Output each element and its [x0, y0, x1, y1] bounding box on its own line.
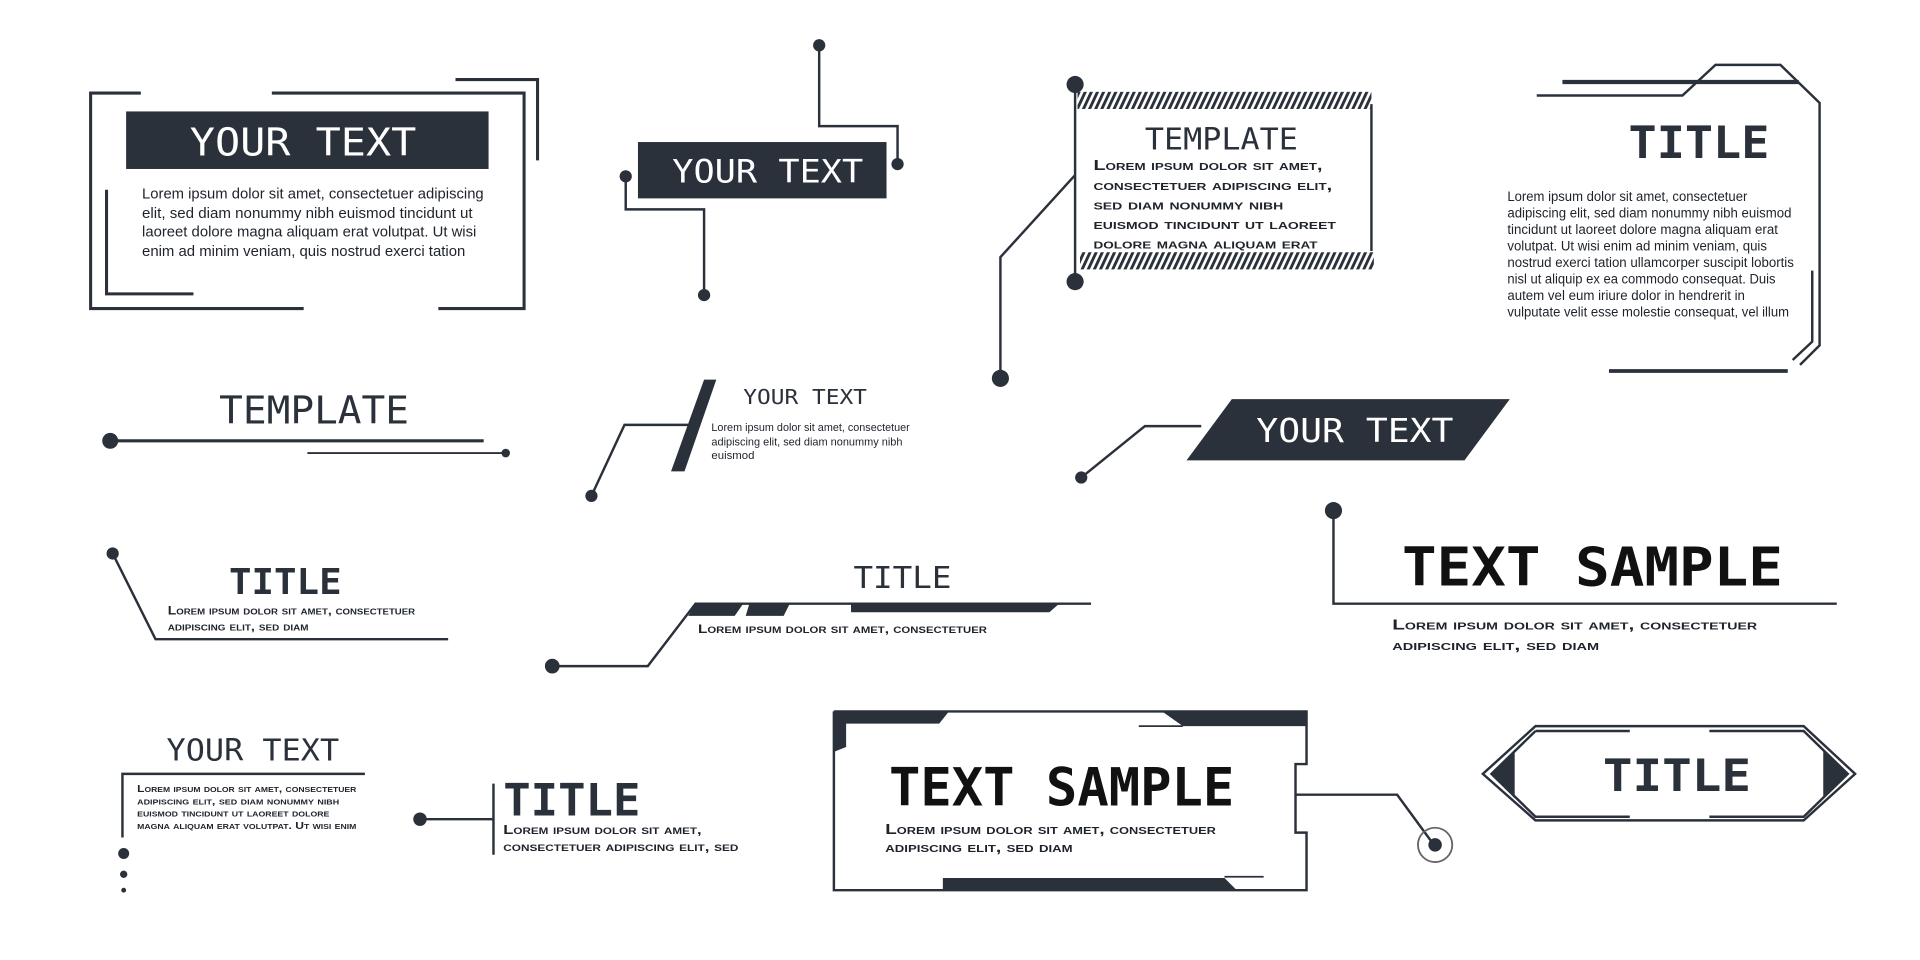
panel: hatched template box: TEMPLATE: [1145, 122, 1298, 157]
panel: title angled frame: volutpat. Ut wisi enim ad minim veniam, quis: [1507, 238, 1767, 254]
panel: title angled frame: autem vel eum iriure dolor in hendrerit in: [1507, 288, 1745, 304]
panel: your text with dots: magna aliquam erat volutpat. Ut wisi enim: [137, 821, 357, 832]
panel: title with angled line: [107, 547, 448, 639]
panel: your text with dots: Lorem ipsum dolor sit amet, consectetuer: [137, 784, 356, 795]
panel: hatched template box: sed diam nonummy nibh: [1093, 197, 1283, 213]
panel: title angled frame: [1507, 65, 1820, 371]
panel: circuit banner your text: YOUR TEXT: [672, 152, 863, 190]
panel: parallelogram your text: [1075, 399, 1510, 484]
panel: hatched template box: consectetuer adipiscing elit,: [1093, 178, 1332, 194]
panel: your text with dots: [118, 733, 365, 893]
panel: slanted bar your text: Lorem ipsum dolor sit amet, consectetuer: [711, 422, 910, 434]
body text 1: enim ad minim veniam, quis nostrud exerci tation: [142, 243, 465, 260]
panel: title with angled line: TITLE: [229, 562, 342, 603]
panel: parallelogram your text: YOUR TEXT: [1256, 411, 1454, 450]
panel: text sample underline: [1325, 502, 1837, 654]
panel: hexagon title: TITLE: [1603, 751, 1751, 802]
panel: bracket box your text: [91, 80, 538, 309]
panel: your text with dots: YOUR TEXT: [167, 733, 339, 768]
panel: your text with dots: adipiscing elit, sed diam nonummy nibh: [137, 796, 339, 807]
panel: text sample tech frame: adipiscing elit, sed diam: [885, 840, 1073, 856]
body text 1: elit, sed diam nonummy nibh euismod tincidunt ut: [142, 205, 473, 222]
panel: title with vertical line: consectetuer adipiscing elit, sed: [503, 839, 739, 854]
panel: title angled frame: nisl ut aliquip ex ea commodo consequat. Duis: [1507, 271, 1776, 287]
panel: text sample tech frame: Lorem ipsum dolor sit amet, consectetuer: [885, 822, 1217, 838]
panel: text sample underline: TEXT SAMPLE: [1402, 535, 1783, 598]
panel: hatched template box: [992, 76, 1374, 387]
body text 1: Lorem ipsum dolor sit amet, consectetuer adipiscing: [142, 185, 484, 202]
panel: title angled frame: nostrud exerci tation ullamcorper suscipit lobortis: [1507, 255, 1794, 271]
panel: template underline: TEMPLATE: [219, 389, 409, 433]
banner: your text: YOUR TEXT: [190, 121, 416, 165]
panel: title with segmented bar: TITLE: [853, 561, 951, 596]
panel: slanted bar your text: [585, 380, 910, 502]
panel: title angled frame: adipiscing elit, sed diam nonummy nibh euismod: [1507, 205, 1791, 221]
panel: title with segmented bar: Lorem ipsum dolor sit amet, consectetuer: [698, 622, 988, 636]
panel: template underline: [102, 389, 510, 457]
panel: text sample underline: adipiscing elit, sed diam: [1392, 638, 1599, 654]
panel: hatched template box: Lorem ipsum dolor sit amet,: [1093, 158, 1322, 174]
panel: text sample tech frame: [834, 711, 1452, 890]
body text 1: laoreet dolore magna aliquam erat volutpat. Ut wisi: [142, 223, 476, 240]
panel: hatched template box: euismod tincidunt ut laoreet: [1093, 217, 1336, 233]
panel: slanted bar your text: YOUR TEXT: [743, 385, 867, 409]
panel: title with segmented bar: [545, 561, 1091, 673]
panel: title angled frame: tincidunt ut laoreet dolore magna aliquam erat: [1507, 222, 1778, 238]
panel: text sample tech frame: TEXT SAMPLE: [889, 758, 1234, 819]
panel: title with angled line: adipiscing elit, sed diam: [168, 621, 309, 634]
body text 1: [142, 185, 484, 260]
panel: slanted bar your text: adipiscing elit, sed diam nonummy nibh: [711, 437, 902, 449]
panel: title angled frame: vulputate velit esse molestie consequat, vel illum: [1507, 305, 1789, 321]
panel: slanted bar your text: euismod: [711, 450, 754, 462]
panel: title with angled line: Lorem ipsum dolor sit amet, consectetuer: [168, 605, 415, 618]
panel: title angled frame: TITLE: [1629, 118, 1769, 169]
panel: title with vertical line: Lorem ipsum dolor sit amet,: [503, 822, 702, 837]
panel: title with vertical line: [413, 776, 739, 855]
panel: hexagon title: [1483, 726, 1855, 820]
panel: hatched template box: dolore magna aliquam erat: [1093, 237, 1318, 253]
banner: your text: [126, 111, 489, 169]
panel: title angled frame: Lorem ipsum dolor sit amet, consectetuer: [1507, 189, 1748, 205]
panel: your text with dots: euismod tincidunt ut laoreet dolore: [137, 809, 330, 820]
panel: circuit banner your text: [620, 39, 904, 301]
panel: title with vertical line: TITLE: [503, 776, 640, 827]
panel: text sample underline: Lorem ipsum dolor sit amet, consectetuer: [1392, 617, 1758, 633]
